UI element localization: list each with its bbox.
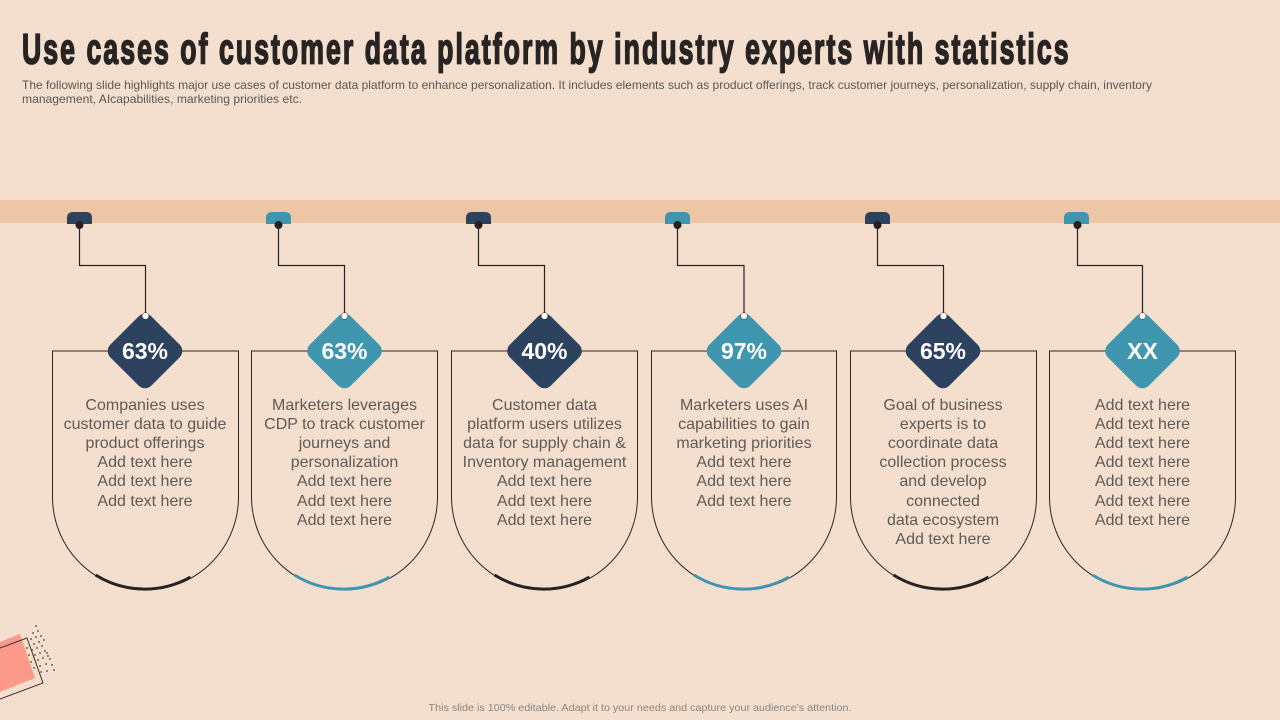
timeline band <box>0 200 1280 223</box>
description text: management, AIcapabilities, marketing priorities etc. <box>22 92 302 106</box>
body text 4: Add text here <box>696 493 792 510</box>
panel: card 5 <box>850 212 1036 590</box>
body text 6 <box>1095 397 1190 529</box>
body text 1: Add text here <box>97 493 193 510</box>
body text 5: Add text here <box>895 531 991 548</box>
accent arc 1 <box>96 575 190 589</box>
body text 5: and develop <box>899 473 987 490</box>
pin 4 <box>665 212 690 224</box>
body text 5: data ecosystem <box>887 512 999 529</box>
pin 3 <box>466 212 491 224</box>
diamond 6 <box>1101 310 1184 392</box>
stat 5: 65% <box>920 338 966 364</box>
body text 1: Companies uses <box>85 397 205 414</box>
footer note: This slide is 100% editable. Adapt it to your needs and capture your audience's attention. <box>428 702 852 714</box>
connector 5 <box>878 225 944 316</box>
body text 4: marketing priorities <box>676 435 812 452</box>
body text 6: Add text here <box>1095 397 1190 414</box>
body text 5: connected <box>906 493 980 510</box>
card outline 4 <box>652 351 836 590</box>
panel: card 2 <box>252 212 438 590</box>
body text 6: Add text here <box>1095 416 1190 433</box>
connector 1 <box>80 225 146 316</box>
diamond 3 <box>503 310 586 392</box>
stat 6: XX <box>1127 338 1158 364</box>
pin dot 6 <box>1074 221 1082 229</box>
body text 2: Marketers leverages <box>272 397 417 414</box>
decorative corner graphic <box>0 625 55 699</box>
body text 4: Add text here <box>696 473 792 490</box>
body text 5: experts is to <box>900 416 986 433</box>
body text 5: collection process <box>879 454 1007 471</box>
stat 4: 97% <box>721 338 767 364</box>
card outline 5 <box>850 351 1036 590</box>
body text 1: product offerings <box>86 435 204 452</box>
body text 6: Add text here <box>1095 512 1190 529</box>
body text 5 <box>879 397 1007 548</box>
accent arc 3 <box>494 575 590 589</box>
body text 2 <box>264 397 425 529</box>
stat 1: 63% <box>122 338 168 364</box>
pin 1 <box>67 212 92 224</box>
body text 6: Add text here <box>1095 493 1190 510</box>
card outline 6 <box>1050 351 1236 590</box>
body text 3 <box>463 397 627 529</box>
body text 2: Add text here <box>297 473 392 490</box>
body text 2: Add text here <box>297 512 392 529</box>
panel: card 3 <box>452 212 638 590</box>
diamond 4 <box>703 310 785 392</box>
connector 3 <box>478 225 544 316</box>
accent arc 5 <box>894 575 988 589</box>
body text 5: Goal of business <box>883 397 1003 414</box>
body text 6: Add text here <box>1095 435 1190 452</box>
body text 6: Add text here <box>1095 454 1190 471</box>
description text: The following slide highlights major use cases of customer data platform to enhance personalization. It includes elements such as product offerings, track customer journeys, personalization, supply chain, inventory <box>22 78 1152 92</box>
diamond dot 5 <box>940 313 947 319</box>
diamond dot 2 <box>341 313 348 319</box>
accent arc 2 <box>294 575 390 589</box>
body text 1 <box>64 397 226 510</box>
body text 4 <box>676 397 812 510</box>
body text 3: platform users utilizes <box>467 416 622 433</box>
body text 4: capabilities to gain <box>678 416 810 433</box>
stat 2: 63% <box>321 338 368 364</box>
diamond dot 3 <box>541 313 548 319</box>
pin 5 <box>865 212 890 224</box>
title: Use cases of customer data platform by industry experts with statistics <box>22 25 1069 73</box>
diamond 5 <box>902 310 984 392</box>
body text 3: Add text here <box>497 512 592 529</box>
body text 2: Add text here <box>297 493 392 510</box>
diamond dot 4 <box>741 313 747 319</box>
body text 3: Add text here <box>497 493 592 510</box>
panel: card 4 <box>652 212 836 590</box>
accent arc 4 <box>694 575 789 589</box>
pin dot 5 <box>874 221 882 229</box>
body text 3: Inventory management <box>463 454 627 471</box>
card outline 2 <box>252 351 438 590</box>
body text 3: data for supply chain & <box>463 435 626 452</box>
connector 4 <box>678 225 744 316</box>
pin 2 <box>266 212 291 224</box>
panel: card 1 <box>52 212 238 590</box>
body text 2: personalization <box>291 454 398 471</box>
body text 2: journeys and <box>298 435 390 452</box>
diamond 2 <box>303 310 386 392</box>
pin dot 2 <box>274 221 282 229</box>
connector 2 <box>278 225 344 316</box>
card outline 1 <box>52 351 238 590</box>
diamond dot 1 <box>142 313 149 319</box>
panel: card 6 <box>1050 212 1236 590</box>
body text 1: Add text here <box>97 473 193 490</box>
connector 6 <box>1078 225 1142 316</box>
body text 3: Customer data <box>492 397 597 414</box>
pin dot 4 <box>674 221 682 229</box>
body text 2: CDP to track customer <box>264 416 425 433</box>
pin dot 3 <box>474 221 482 229</box>
body text 6: Add text here <box>1095 473 1190 490</box>
body text 1: customer data to guide <box>64 416 226 433</box>
pin 6 <box>1064 212 1089 224</box>
body text 4: Add text here <box>696 454 792 471</box>
body text 1: Add text here <box>97 454 193 471</box>
description text <box>22 78 1152 106</box>
stat 3: 40% <box>521 338 568 364</box>
body text 4: Marketers uses AI <box>680 397 808 414</box>
body text 3: Add text here <box>497 473 592 490</box>
body text 5: coordinate data <box>888 435 998 452</box>
diamond 1 <box>104 310 186 392</box>
accent arc 6 <box>1092 575 1188 589</box>
diamond dot 6 <box>1139 313 1146 319</box>
pin dot 1 <box>76 221 84 229</box>
card outline 3 <box>452 351 638 590</box>
